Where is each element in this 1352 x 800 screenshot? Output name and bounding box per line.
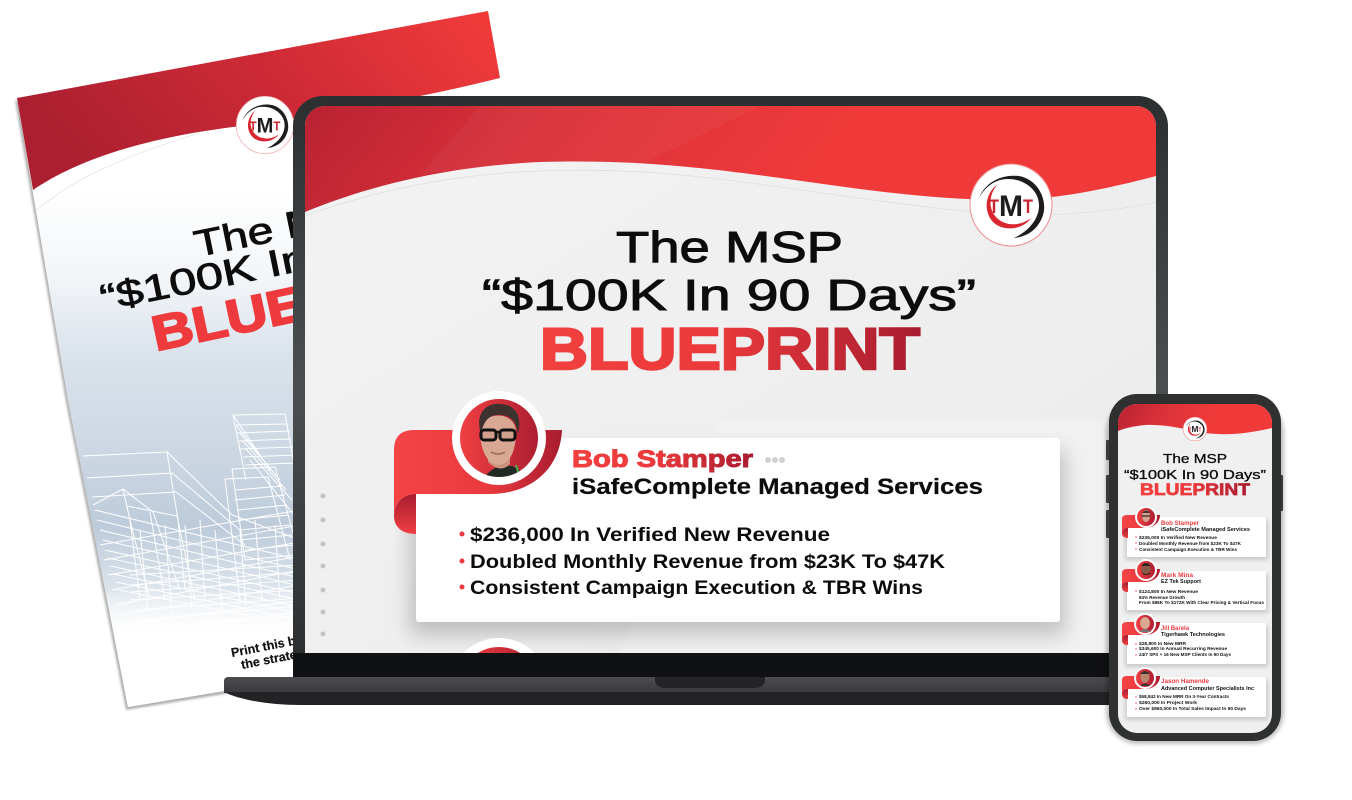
paper logo [236, 96, 294, 154]
subtle background facets [620, 420, 1156, 653]
phone card: Bob Stamper: Consistent Campaign Execution & TBR Wins [1139, 547, 1237, 552]
paper shadow edge [15, 100, 310, 710]
logo: T [989, 197, 999, 218]
paper logo: T [273, 119, 280, 134]
paper body gradient [32, 188, 293, 698]
title line 2: “$100K In 90 Days” [482, 271, 976, 320]
paper title line 1: The MSP [190, 186, 388, 265]
phone card: Mark Mina: From $86K To $172K With Clear Pricing & Vertical Focus [1139, 600, 1264, 605]
phone card: Bob Stamper: iSafeComplete Managed Services [1161, 527, 1250, 533]
phone card: Mark Mina: $124,800 In New Revenue [1139, 589, 1198, 594]
smartphone [1106, 394, 1284, 744]
phone card: Mark Mina: Mark Mina [1161, 573, 1194, 579]
laptop lower bezel [293, 653, 1168, 678]
name: Bob Stamper [572, 446, 753, 473]
ribbon [394, 430, 562, 534]
phone screen [1118, 404, 1272, 733]
phone card: Jason Hamende: Over $860,000 In Total Sales Impact In 90 Days [1139, 706, 1246, 711]
header line [305, 170, 1156, 216]
logo: T [1023, 197, 1033, 218]
paper footer text: the strategy [240, 645, 312, 672]
logo: M [999, 190, 1023, 223]
title BLUEPRINT: BLUEPRINT [540, 317, 920, 382]
side dots [320, 494, 326, 636]
paper logo: M [257, 115, 273, 138]
laptop base underside [224, 692, 1168, 705]
phone title: “$100K In 90 Days” [1124, 467, 1266, 482]
phone card: Mark Mina: 84% Revenue Growth [1139, 595, 1185, 600]
phone card: Bob Stamper [1122, 506, 1268, 560]
bullet list [460, 525, 945, 599]
phone card: Jill Barela [1122, 613, 1268, 667]
laptop base [224, 677, 1168, 693]
phone shadow [1106, 400, 1284, 744]
paper title line 2: “$100K In 90 Days” [96, 195, 516, 319]
company: iSafeComplete Managed Services [572, 474, 983, 499]
phone card: Jill Barela: $28,800 In New MRR [1139, 641, 1187, 646]
screen red header [305, 106, 1156, 212]
laptop lid frame [293, 96, 1168, 680]
phone title: The MSP [1163, 451, 1227, 466]
paper header line [37, 133, 200, 210]
paper red header [17, 11, 500, 190]
phone card: Mark Mina: EZ Tek Support [1161, 579, 1201, 585]
laptop screen [305, 106, 1156, 653]
phone card: Jill Barela: 24/7 SPS + 16 New MSP Clients In 90 Days [1139, 652, 1231, 657]
paper title BLUEPRINT: BLUEPRINT [147, 241, 476, 362]
logo [970, 164, 1052, 246]
wireframe city illustration [83, 414, 293, 616]
paper footer text: Print this blueprint [230, 625, 342, 660]
title line 1: The MSP [616, 223, 843, 272]
phone card: Jason Hamende: Jason Hamende [1161, 679, 1210, 685]
phone card: Bob Stamper: Doubled Monthly Revenue from $23K To $47K [1139, 541, 1242, 546]
bullet list: Doubled Monthly Revenue from $23K To $47K [470, 552, 945, 573]
printed blueprint document [14, 11, 500, 711]
phone title [1124, 453, 1266, 496]
phone title: BLUEPRINT [1140, 481, 1250, 499]
phone card: Bob Stamper: $236,000 In Verified New Revenue [1139, 535, 1217, 540]
phone card: Mark Mina [1122, 559, 1268, 613]
ellipsis dots [765, 457, 785, 463]
phone card: Jason Hamende: Advanced Computer Specialists Inc [1161, 686, 1254, 692]
phone logo: M [1192, 424, 1198, 434]
phone body [1109, 394, 1281, 741]
phone logo: T [1189, 427, 1192, 433]
card body [416, 438, 1060, 622]
avatar [452, 391, 546, 485]
phone card: Jason Hamende [1122, 667, 1268, 720]
header lighter band [420, 106, 760, 175]
phone card: Jason Hamende: $260,000 In Project Work [1139, 700, 1197, 705]
next testimonial avatar [464, 638, 534, 653]
phone logo [1183, 417, 1207, 441]
phone card: Jill Barela: Tigerhawk Technologies [1161, 632, 1225, 638]
phone buttons [1106, 440, 1283, 538]
phone logo: T [1198, 427, 1202, 433]
bullet list: Consistent Campaign Execution & TBR Wins [470, 578, 923, 599]
laptop notch [655, 677, 765, 688]
paper sheet [17, 11, 600, 707]
paper logo: T [250, 119, 257, 134]
phone card: Bob Stamper: Bob Stamper [1161, 521, 1200, 527]
laptop [224, 96, 1168, 738]
phone red header [1118, 404, 1272, 434]
phone card: Jill Barela: Jill Barela [1161, 626, 1190, 632]
card shadow [410, 450, 1065, 635]
phone card: Jill Barela: $345,600 In Annual Recurring Revenue [1139, 646, 1227, 651]
wireframe fade to white [110, 614, 293, 650]
bullet list: $236,000 In Verified New Revenue [470, 525, 830, 546]
phone card: Jason Hamende: $58,842 In New MRR On 3-Year Contracts [1139, 694, 1229, 699]
testimonial card: Bob Stamper [394, 391, 1065, 635]
